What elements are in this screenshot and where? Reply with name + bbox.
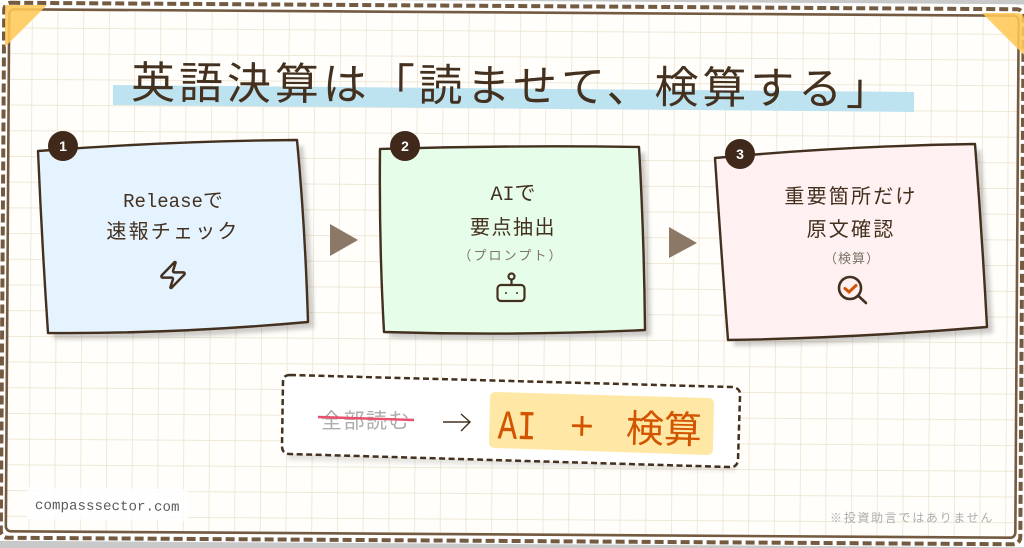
step subtext: （プロンプト）: [458, 248, 564, 263]
card shadow: [44, 146, 314, 339]
arrow: step 1 to 2: [330, 224, 358, 256]
icon: robot: [498, 274, 524, 301]
step text: AIで: [490, 184, 536, 207]
corner tape: top right: [982, 13, 1024, 55]
title highlight stripe: [113, 85, 914, 112]
step text: 重要箇所だけ: [784, 185, 918, 208]
number badge: 1: [59, 138, 67, 154]
step text: 速報チェック: [106, 220, 240, 243]
number badge: 2: [401, 138, 409, 154]
number badge: [48, 131, 78, 161]
step text: 原文確認: [807, 218, 895, 241]
card shadow: [721, 150, 993, 346]
step text: Releaseで: [123, 191, 223, 214]
callout box: [282, 375, 740, 467]
number badge: [725, 139, 755, 169]
title: 英語決算は「読ませて、検算する」: [131, 59, 894, 115]
highlighted answer: AI: [497, 405, 537, 453]
number badge: 3: [736, 146, 744, 162]
callout: summary: [282, 375, 740, 471]
step text: [784, 185, 918, 241]
highlighted answer: ＋: [568, 411, 596, 443]
number badge: [390, 131, 420, 161]
disclaimer: ※投資助言ではありません: [830, 510, 994, 525]
corner tape: top left: [5, 5, 47, 47]
card body: [380, 146, 645, 334]
struck-through text: 全部読む: [321, 410, 411, 433]
step text: 要点抽出: [470, 216, 556, 239]
card shadow: [386, 152, 651, 340]
card body: [715, 144, 987, 340]
arrow: to answer: [443, 414, 470, 431]
highlighted answer: [489, 392, 714, 457]
panel: step 2: [380, 131, 651, 340]
arrow: step 2 to 3: [669, 227, 697, 258]
panel: step 3: [715, 139, 993, 346]
icon: magnifier with check: [839, 277, 866, 303]
card body: [38, 140, 308, 333]
website label: compasssector.com: [35, 498, 180, 516]
icon: lightning: [161, 262, 185, 288]
step text: [470, 184, 556, 239]
panel: step 1: [38, 131, 314, 339]
step subtext: （検算）: [824, 251, 880, 266]
website label: [27, 487, 188, 521]
step text: [106, 191, 240, 243]
callout shadow: [288, 381, 738, 471]
highlighted answer: 検算: [625, 409, 702, 453]
